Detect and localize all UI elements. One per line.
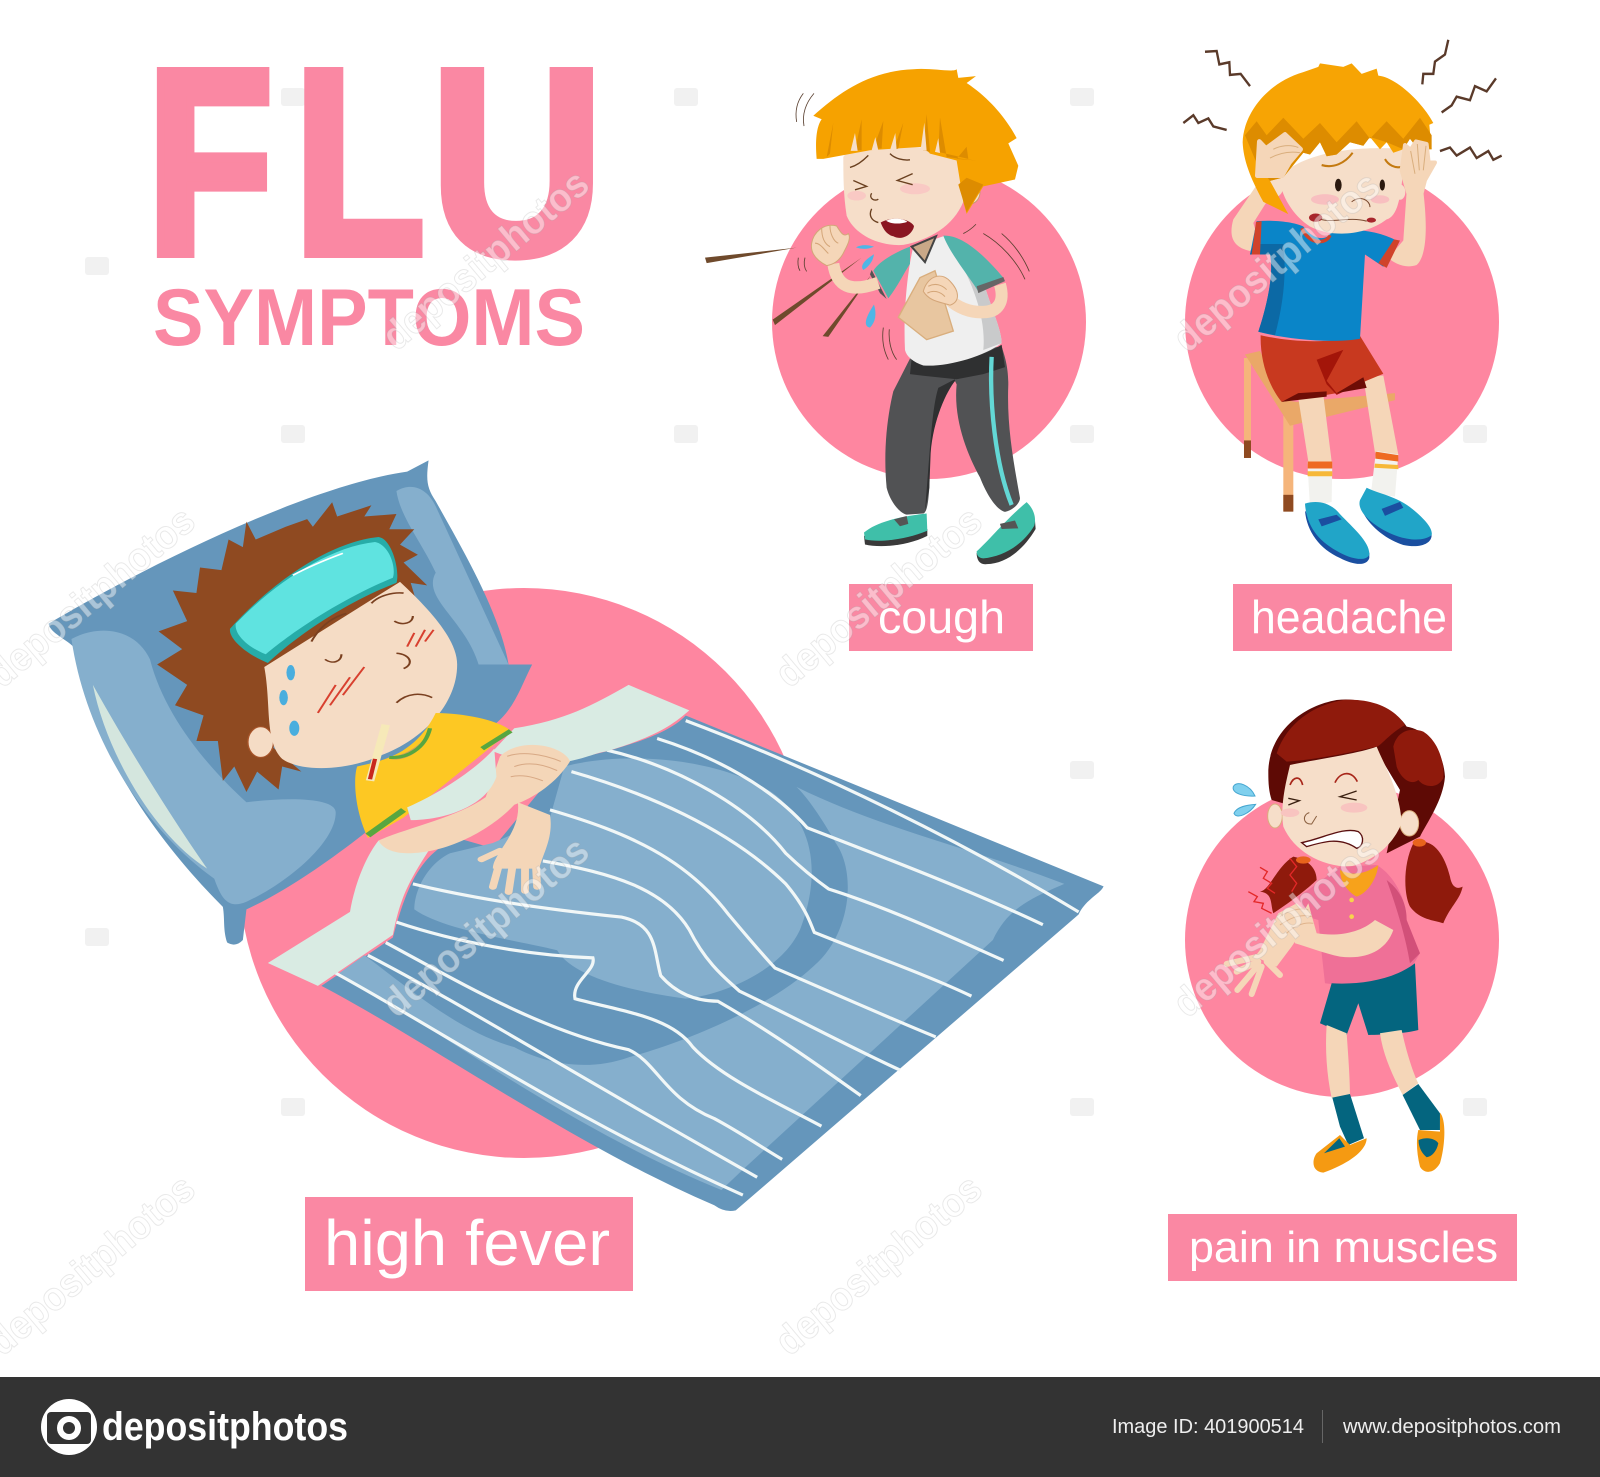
arms, fist and tissue <box>811 225 1002 340</box>
sweat drops <box>279 665 299 736</box>
shirt <box>1298 865 1420 985</box>
pain marks <box>1248 858 1297 913</box>
blanket <box>321 716 1104 1211</box>
arms <box>1231 170 1426 266</box>
title word: FLU: L <box>294 15 425 309</box>
illustration: boy with fever in bed <box>49 460 1104 1211</box>
face <box>1268 747 1419 867</box>
pink circle: cough <box>772 165 1086 479</box>
label: high fever <box>305 1197 633 1291</box>
hair <box>813 69 1018 214</box>
water droplets <box>856 245 875 328</box>
watermarks <box>0 161 1388 1364</box>
arms and hands <box>1227 903 1393 994</box>
watermarks: depositphotos <box>374 161 597 359</box>
motion lines <box>796 93 1029 360</box>
watermark camera icons <box>85 88 1487 1116</box>
label: pain in muscles <box>1168 1214 1517 1281</box>
legs and socks <box>1326 1025 1440 1145</box>
illustration: boy with headache on a chair <box>1183 40 1502 564</box>
shorts <box>1320 963 1418 1035</box>
hair back <box>1268 699 1445 853</box>
pants <box>885 345 1020 515</box>
title <box>147 15 603 363</box>
pigtails <box>1260 839 1463 923</box>
hair <box>157 502 427 792</box>
shoes <box>864 502 1036 564</box>
pain zigzags <box>1183 40 1502 160</box>
pink circle: high fever <box>239 588 809 1158</box>
shirt <box>1250 221 1400 341</box>
pillow <box>49 460 532 945</box>
pink circle: pain in muscles <box>1185 783 1499 1097</box>
cough lines <box>705 248 872 337</box>
watermarks: depositphotos <box>1165 163 1388 361</box>
title word: FLU <box>147 15 603 309</box>
label: headache: headache <box>1251 591 1447 643</box>
title word: FLU: F <box>147 15 273 309</box>
watermarks: depositphotos <box>374 828 597 1026</box>
sleeve <box>407 749 496 820</box>
shirt <box>355 713 511 838</box>
illustration: girl with muscle pain <box>1227 699 1463 1173</box>
label: cough <box>849 584 1033 651</box>
hair front <box>1277 700 1444 786</box>
label: high fever: high fever <box>324 1207 610 1279</box>
thermometer <box>370 725 386 781</box>
shoes <box>1305 488 1432 564</box>
head <box>1269 148 1405 234</box>
legs and socks <box>1298 376 1398 507</box>
footer brand name: depositphotos <box>102 1405 348 1449</box>
illustration: coughing boy <box>705 69 1036 564</box>
ice pack <box>230 537 397 663</box>
pink circle: headache <box>1185 165 1499 479</box>
shirt <box>870 236 1005 366</box>
title word: SYMPTOMS: SYMPTOMS <box>153 273 585 363</box>
label: pain in muscles: pain in muscles <box>1189 1223 1498 1272</box>
shoes <box>1313 1113 1444 1173</box>
label: cough: cough <box>878 591 1005 643</box>
shorts <box>1261 335 1383 402</box>
hands <box>1257 135 1435 193</box>
watermarks: depositphotos <box>1165 828 1388 1026</box>
head <box>843 147 980 245</box>
hair <box>1243 63 1433 214</box>
watermarks: depositphotos <box>767 498 990 696</box>
footer website: www.depositphotos.com <box>1342 1416 1561 1438</box>
folded sheet <box>268 685 689 986</box>
footer image id: Image ID: 401900514 <box>1112 1416 1304 1438</box>
watermarks: depositphotos <box>767 1166 990 1364</box>
footer logo icon: camera <box>41 1399 97 1455</box>
title word: FLU: U <box>431 15 603 309</box>
face <box>248 582 457 768</box>
arms and hands <box>379 745 570 892</box>
footer bar <box>0 1377 1600 1477</box>
chair <box>1244 351 1395 512</box>
sweat drops <box>1233 784 1256 816</box>
